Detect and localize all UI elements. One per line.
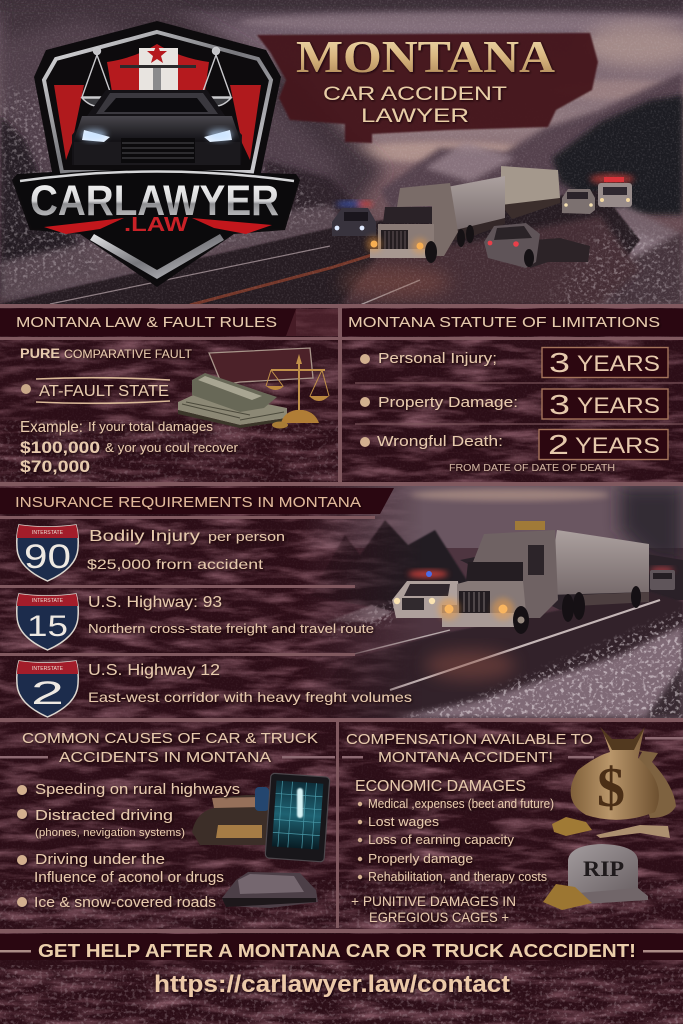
pickup truck (562, 189, 595, 214)
icon: money bags: $ (597, 757, 625, 819)
icon: interstate 90 shield: 90 (24, 538, 71, 576)
far trailer (501, 166, 560, 219)
icon: interstate 15 shield: INTERSTATE (32, 598, 64, 604)
economic damages list: Medical ,expenses (beet and future) (368, 796, 554, 811)
economic damages list: Rehabilitation, and therapy costs (368, 869, 547, 884)
personal injury row: 3 (549, 347, 570, 378)
wrongful death row: Wrongful Death: (377, 433, 503, 450)
ambulance with emergency lights (590, 174, 634, 207)
semi cab (438, 521, 641, 634)
economic damages list: Lost wages (368, 814, 440, 829)
far police car (650, 567, 675, 590)
logo domain: .LAW (124, 214, 188, 236)
panel: common causes (0, 730, 335, 911)
section heading: COMPENSATION AVAILABLE TO (346, 731, 593, 748)
statute footnote: FROM DATE OF DATE OF DEATH (449, 463, 615, 474)
cause: distracted driving: (phones, nevigation systems) (35, 827, 185, 839)
subtitle line one: CAR ACCIDENT (323, 84, 508, 105)
contact URL: https://carlawyer.law/contact (154, 971, 510, 998)
damages example: & yor you coul recover (105, 440, 239, 455)
property damage row: YEARS (577, 393, 660, 418)
route text (88, 662, 412, 705)
property damage row: 3 (549, 389, 570, 420)
route text: U.S. Highway: 93 (88, 594, 222, 611)
coverage text: $25,000 frorn accident (87, 556, 263, 572)
personal injury row: YEARS (577, 351, 660, 376)
row: interstate 90 bodily injury (17, 525, 285, 581)
panel: statute of limitations (342, 309, 683, 474)
punitive damages note: EGREGIOUS CAGES + (369, 909, 509, 925)
damages example (20, 419, 239, 476)
icon: interstate 90 shield: INTERSTATE (32, 530, 64, 536)
row: interstate 2 highway 12 (17, 661, 412, 717)
cause: speeding: Speeding on rural highways (35, 781, 240, 798)
icon: interstate 15 shield (17, 594, 78, 650)
icon: interstate 2 shield (17, 661, 78, 717)
punitive damages note: + PUNITIVE DAMAGES IN (351, 893, 516, 909)
title banner (257, 31, 598, 143)
divider lines between sections (0, 304, 683, 933)
cause: driving under the influence (17, 851, 224, 886)
route text: U.S. Highway 12 (88, 662, 220, 679)
panel: Montana law and fault rules (0, 309, 338, 476)
section heading (0, 730, 335, 766)
row: interstate 15 highway 93 (17, 594, 374, 650)
section header (0, 309, 338, 336)
scales of justice pillars (82, 48, 231, 106)
punitive damages note (351, 893, 516, 925)
section heading (342, 731, 683, 766)
comparative fault heading: PURE (20, 346, 60, 361)
comparative fault heading: COMPARATIVE FAULT (64, 347, 193, 361)
main title: MONTANA (296, 31, 555, 82)
red shield panels and flag (54, 44, 261, 160)
economic damages list (355, 778, 554, 884)
section header: MONTANA STATUTE OF LIMITATIONS (348, 314, 660, 331)
cause: ice and snow: Ice & snow-covered roads (34, 894, 216, 911)
property damage row (360, 389, 668, 420)
economic damages list: Properly damage (368, 851, 473, 866)
wrongful death row: YEARS (575, 433, 660, 458)
section heading: ACCIDENTS IN MONTANA (59, 749, 271, 766)
illustration: smartphone (265, 773, 330, 862)
car front (72, 90, 242, 165)
damages example: $70,000 (20, 457, 90, 476)
illustration: cash and gold scale (178, 348, 329, 428)
comparative fault heading (20, 346, 193, 361)
police pickup (392, 570, 462, 618)
wrongful death row (360, 429, 668, 460)
trailer (547, 530, 649, 606)
icon: interstate 2 shield: INTERSTATE (32, 666, 64, 672)
at-fault state callout: AT-FAULT STATE (39, 383, 169, 400)
icon: interstate 90 shield (17, 525, 78, 581)
property damage row: Property Damage: (378, 394, 518, 411)
police car (332, 201, 376, 236)
subtitle line two: LAWYER (361, 106, 469, 127)
background: lower information panels (0, 306, 683, 1024)
panel: insurance requirements (0, 488, 412, 717)
illustration: damaged machinery (192, 787, 269, 845)
section header: INSURANCE REQUIREMENTS IN MONTANA (15, 494, 361, 511)
panel: compensation available (342, 727, 683, 925)
section header: MONTANA LAW & FAULT RULES (16, 314, 277, 331)
personal injury row (360, 347, 668, 378)
logo: CarLawyer.law shield (12, 21, 300, 287)
route text (88, 594, 374, 636)
icon: interstate 15 shield: 15 (27, 610, 68, 643)
icon: RIP headstone (543, 844, 648, 910)
cause: distracted driving: Distracted driving (35, 807, 173, 824)
coverage text: Bodily Injury (89, 528, 200, 545)
background: hero winter highway scene (0, 0, 683, 306)
wrecked car (484, 223, 590, 268)
icon: money bags (552, 727, 676, 838)
cause: distracted driving (17, 807, 185, 839)
logo banner (15, 169, 298, 282)
logo wordmark: CARLAWYER (30, 177, 279, 225)
section heading: COMMON CAUSES OF CAR & TRUCK (22, 730, 318, 747)
cause: driving under the influence: Driving under the (35, 851, 165, 868)
section header (0, 488, 394, 514)
section heading: MONTANA ACCIDENT! (378, 749, 553, 766)
damages example: $100,000 (20, 438, 100, 457)
cause: driving under the influence: Influence of aconol or drugs (34, 869, 224, 886)
damages example: If your total damages (88, 419, 214, 434)
icon: RIP headstone: RIP (583, 856, 624, 881)
semi trailer (447, 176, 505, 240)
coverage text: per person (208, 529, 285, 544)
economic damages list: Loss of earning capacity (368, 832, 515, 847)
route text: East-west corridor with heavy freght volumes (88, 689, 412, 705)
damages example: Example: (20, 419, 83, 436)
coverage text (87, 528, 285, 572)
at-fault state callout (21, 378, 170, 403)
personal injury row: Personal Injury; (378, 350, 497, 367)
illustration: truck pile-up on hero highway (332, 166, 634, 268)
call to action (0, 934, 683, 998)
wrongful death row: 2 (548, 429, 569, 460)
middle highway scene (300, 486, 683, 718)
call to action heading: GET HELP AFTER A MONTANA CAR OR TRUCK ACCCIDENT! (38, 941, 636, 961)
icon: interstate 2 shield: 2 (31, 675, 64, 711)
economic damages list: ECONOMIC DAMAGES (355, 778, 526, 795)
semi cab (366, 183, 474, 263)
illustration: snow-covered car (222, 872, 318, 908)
route text: Northern cross-state freight and travel route (88, 621, 374, 636)
